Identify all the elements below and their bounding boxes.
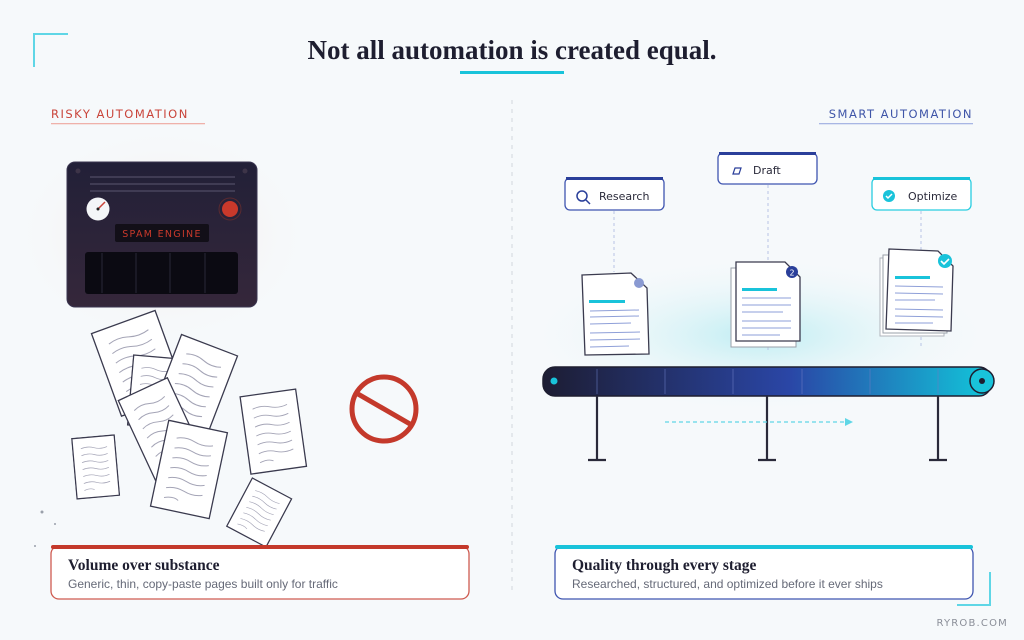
glow behind machine [12,125,312,345]
title: Not all automation is created equal. [308,35,716,65]
label: draft: Draft [753,164,781,177]
conveyor legs [588,396,947,460]
doc: research [582,273,649,355]
callout: volume over substance [51,545,469,599]
corner bracket bottom-right [957,572,990,605]
callout: quality through every stage: Researched, structured, and optimized before it ever ships [572,577,883,591]
label: SPAM ENGINE [122,229,202,240]
footer credit: RYROB.COM [936,618,1008,629]
label [115,224,209,242]
callout: volume over substance: Generic, thin, copy-paste pages built only for traffic [68,577,338,591]
glow behind conveyor [520,255,1000,415]
callout: volume over substance: Volume over substance [68,557,220,574]
doc: draft: 2 [789,268,795,278]
divider [511,100,513,592]
doc: draft [731,262,800,347]
callout: quality through every stage: Quality through every stage [572,557,757,574]
label: optimize [872,177,971,210]
heading: risky automation: RISKY AUTOMATION [51,107,189,121]
label: optimize: Optimize [908,190,958,203]
red button [219,198,241,220]
doc: optimize [880,249,953,336]
machine: spam engine [67,162,257,307]
decorative dots [34,510,56,547]
label: research: Research [599,190,649,203]
arrow: flow direction [665,418,853,426]
conveyor belt [543,367,994,396]
heading: smart automation: SMART AUTOMATION [829,107,973,121]
label: research [565,177,664,210]
gauge [86,198,110,220]
callout: quality through every stage [555,545,973,599]
corner bracket top-left [34,34,68,67]
dotted connectors [614,185,921,350]
label: draft [718,152,817,184]
icon: no sign [352,377,416,441]
pile of spam pages [72,311,306,547]
